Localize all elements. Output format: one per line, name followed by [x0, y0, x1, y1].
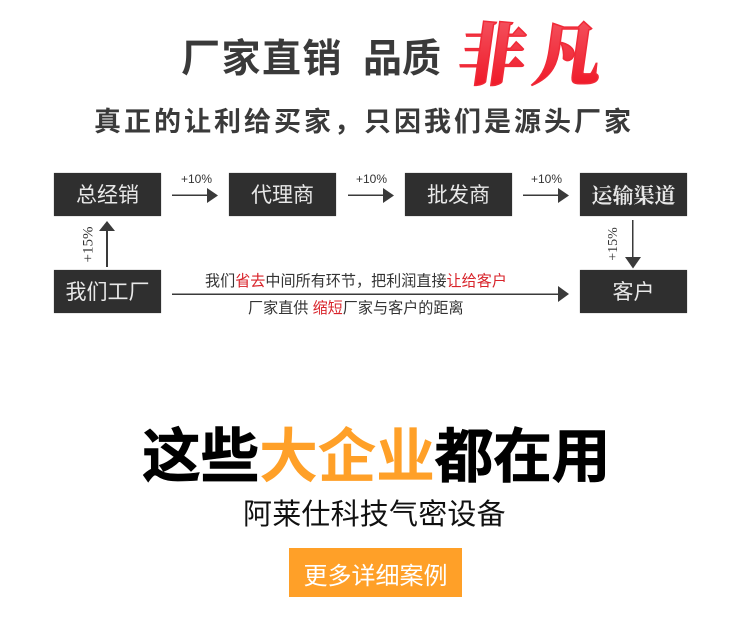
flow box: customer: 客户	[612, 281, 654, 304]
headline: factory direct sale: 厂家直销	[181, 38, 343, 81]
line text: shorten distance: 厂家直供 缩短厂家与客户的距离	[248, 300, 464, 317]
big heading: 这些大企业都在用	[142, 424, 610, 490]
button: more case studies	[289, 548, 462, 597]
flow box: wholesaler	[405, 173, 512, 216]
subheading: 真正的让利给买家，只因我们是源头厂家	[94, 107, 634, 137]
calligraphic red word: 非凡	[452, 0, 618, 99]
label +10% first: +10%	[181, 172, 212, 186]
flow box: customer	[580, 270, 687, 313]
flow box: our factory	[54, 270, 161, 313]
label +10% second: +10%	[356, 172, 387, 186]
flow box: transport channel: 运输渠道	[592, 184, 676, 208]
headline: quality: 品质	[363, 38, 441, 81]
flow box: our factory: 我们工厂	[66, 281, 150, 304]
company subtitle: 阿莱仕科技气密设备	[243, 499, 506, 531]
flow box: general distributor: 总经销	[76, 184, 139, 207]
label +10% third: +10%	[531, 172, 562, 186]
button: more case studies: 更多详细案例	[304, 563, 448, 590]
flow box: wholesaler: 批发商	[427, 184, 490, 207]
flow box: general distributor	[54, 173, 161, 216]
label +15% left: +15%	[80, 227, 96, 262]
flow box: transport channel	[580, 173, 687, 216]
label +15% right: +15%	[606, 227, 621, 261]
line text: remove middlemen: 我们省去中间所有环节，把利润直接让给客户	[205, 273, 507, 290]
flow box: agent	[229, 173, 336, 216]
flow box: agent: 代理商	[251, 184, 314, 207]
